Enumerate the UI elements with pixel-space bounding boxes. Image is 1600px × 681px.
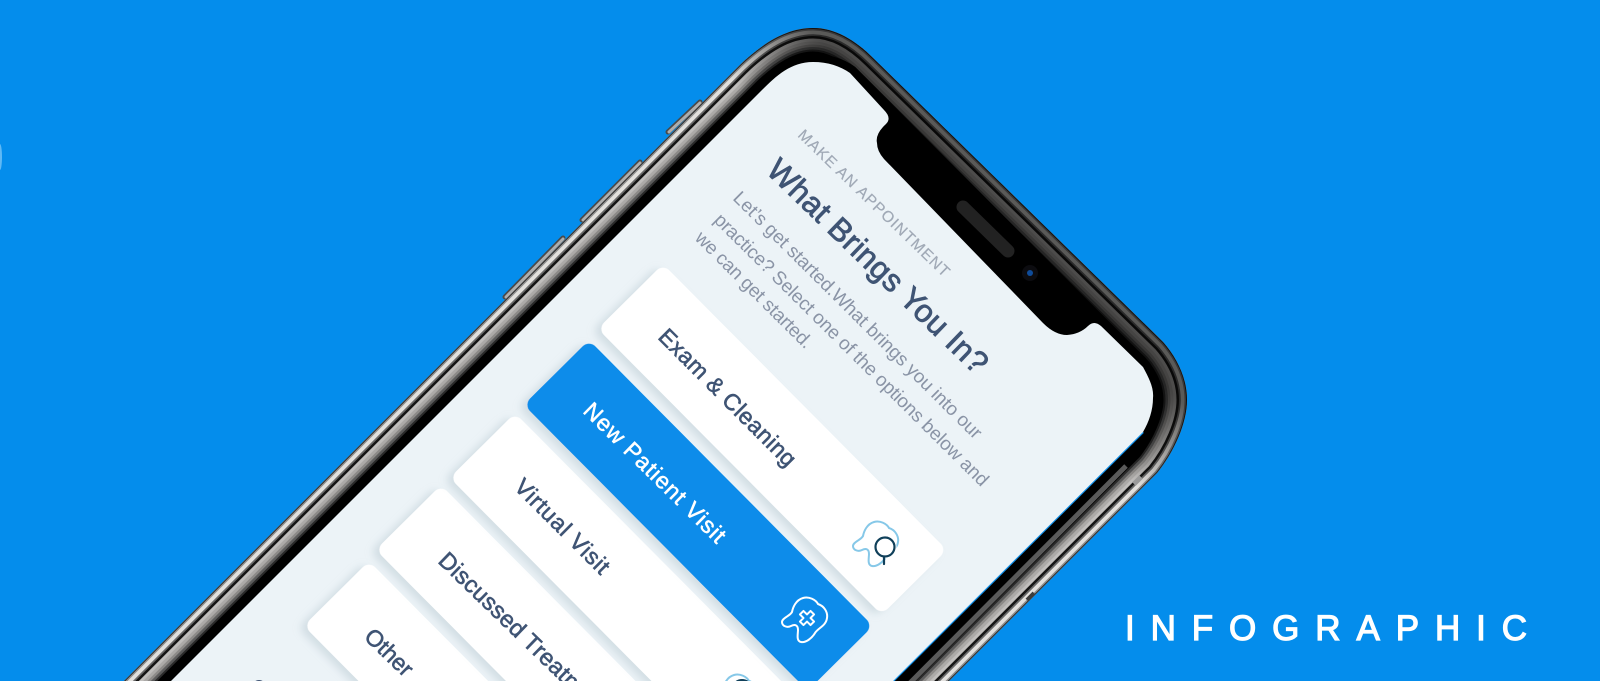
left edge glint	[0, 144, 2, 170]
label: new patient visit: New Patient Visit	[578, 397, 732, 548]
intro text: practice? Select one of the options below and	[709, 210, 992, 491]
caption: INFOGRAPHIC	[1125, 609, 1527, 648]
card: discussed treatment	[372, 488, 636, 681]
black bezel inner	[140, 62, 1153, 681]
lower right band shading	[885, 466, 1126, 681]
icon: third tooth clipped	[725, 674, 752, 681]
heading: What Brings You In?	[760, 151, 996, 381]
label: other: Other	[360, 623, 419, 681]
camera	[1022, 265, 1038, 281]
screen	[140, 62, 1153, 681]
side buttons	[505, 102, 700, 297]
intro text: Let’s get started.What brings you into our	[728, 188, 986, 444]
icon: tooth with magnifier	[853, 521, 898, 566]
right side frame ticks	[1134, 477, 1141, 484]
card: other	[300, 564, 488, 681]
icon: tooth with cross	[782, 597, 827, 642]
card: virtual visit	[450, 413, 799, 681]
eyebrow: MAKE AN APPOINTMENT	[794, 127, 953, 281]
metal frame bands	[100, 28, 1187, 681]
blue edge line	[893, 432, 1143, 681]
card: new patient visit	[524, 340, 873, 681]
phone	[100, 28, 1187, 681]
label: virtual visit: Virtual Visit	[509, 473, 616, 580]
phone body	[100, 28, 1187, 681]
screen contents	[252, 127, 996, 681]
speaker	[963, 207, 1008, 251]
card: exam and cleaning	[598, 264, 947, 615]
label: exam and cleaning: Exam & Cleaning	[653, 323, 802, 472]
clipped back control	[256, 680, 262, 681]
intro text: we can get started.	[690, 227, 817, 353]
